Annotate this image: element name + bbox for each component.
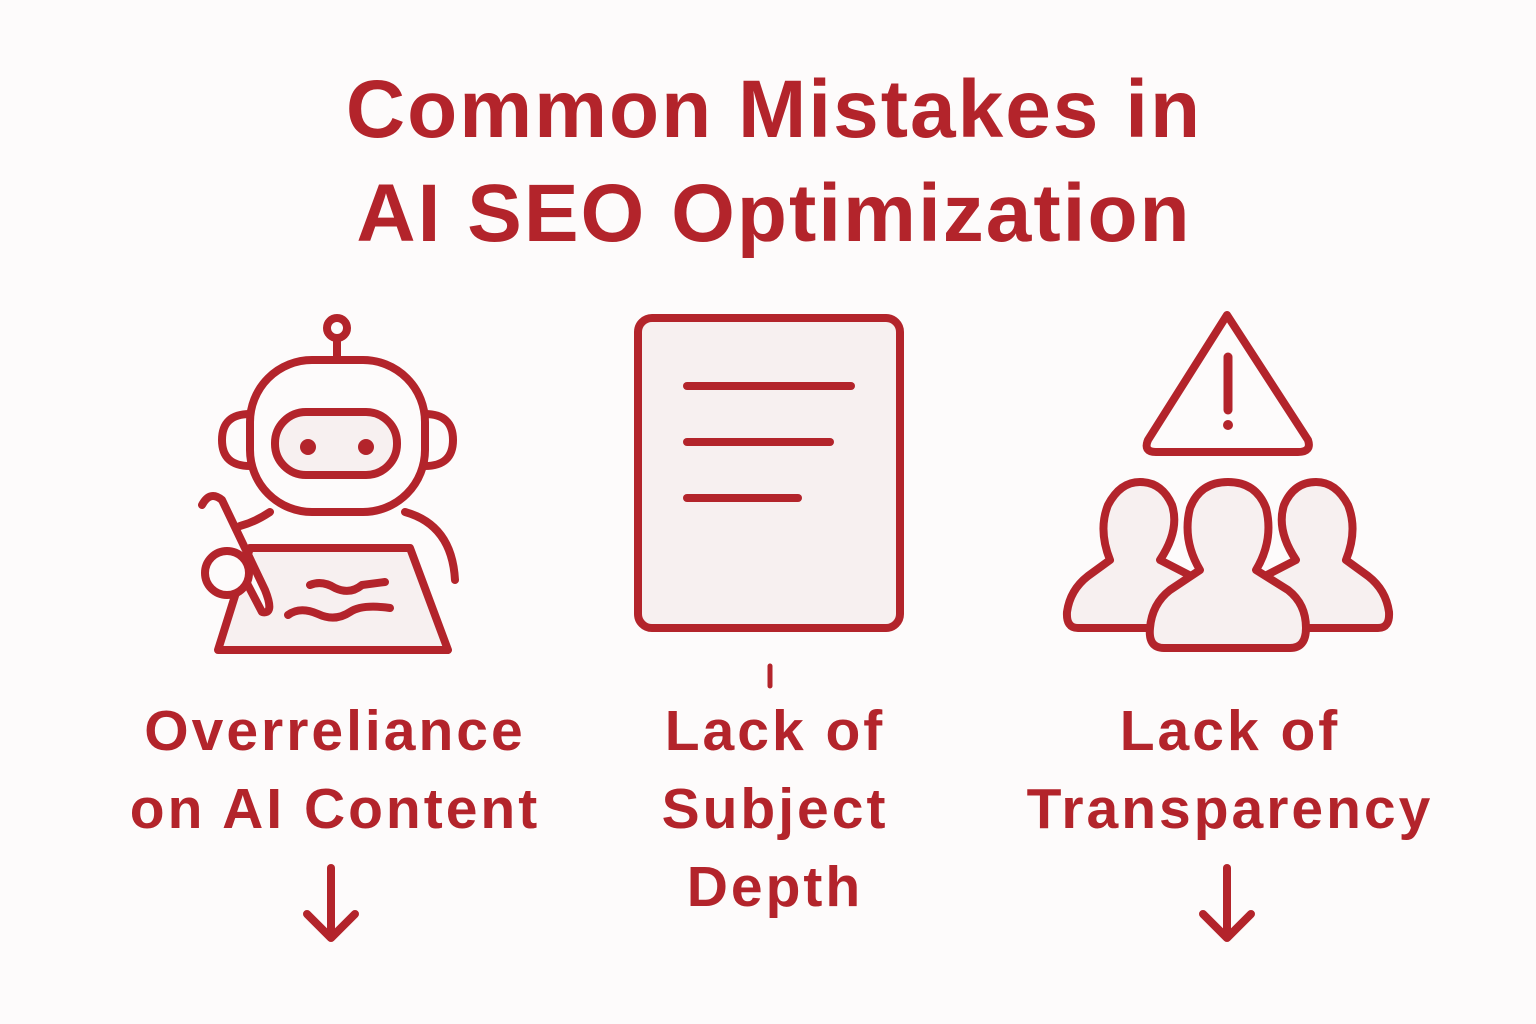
label: overreliance: on AI Content bbox=[130, 777, 540, 841]
arrow: left bbox=[307, 868, 355, 938]
label: overreliance: Overreliance bbox=[144, 699, 526, 763]
title: AI SEO Optimization bbox=[356, 168, 1192, 259]
icon: warning and people bbox=[1067, 315, 1389, 648]
label: subject depth: Depth bbox=[687, 855, 863, 919]
label: subject depth bbox=[662, 699, 888, 919]
icon: robot writing bbox=[202, 318, 455, 650]
label: transparency: Transparency bbox=[1027, 777, 1433, 841]
label: subject depth: Subject bbox=[662, 777, 888, 841]
label: transparency: Lack of bbox=[1120, 699, 1340, 763]
label: transparency bbox=[1027, 699, 1433, 841]
arrow: right bbox=[1203, 868, 1251, 938]
label: subject depth: Lack of bbox=[665, 699, 885, 763]
label: overreliance bbox=[130, 699, 540, 841]
title: Common Mistakes in bbox=[346, 64, 1202, 155]
icon: document bbox=[638, 318, 900, 686]
title bbox=[346, 64, 1202, 259]
